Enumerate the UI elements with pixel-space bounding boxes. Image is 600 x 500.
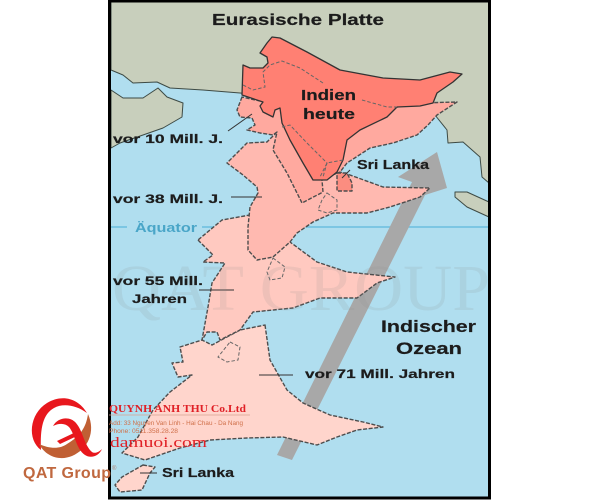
label: Äquator: Äquator bbox=[135, 220, 197, 235]
equator line bbox=[111, 226, 489, 228]
label: Indien heute: Indien bbox=[301, 87, 356, 104]
landmass: India 55 million years ago bbox=[198, 215, 395, 340]
label: Sri Lanka lower: Sri Lanka bbox=[162, 466, 235, 480]
landmass: India 38 million years ago bbox=[227, 132, 430, 260]
leader lines bbox=[140, 114, 350, 473]
company website: damuoi.com bbox=[110, 435, 207, 451]
company name: QUYNH ANH THU Co.Ltd bbox=[109, 404, 246, 415]
icon: QAT Group logo bbox=[32, 398, 102, 458]
label: vor 10 Mill. J.: vor 10 Mill. J. bbox=[113, 132, 223, 146]
landmass: India 71 million years ago bbox=[115, 325, 383, 492]
label: vor 71 Mill. Jahren: vor 71 Mill. Jahren bbox=[305, 367, 455, 381]
label: vor 38 Mill. J.: vor 38 Mill. J. bbox=[113, 192, 223, 206]
label: Indischer Ozean: Indischer bbox=[381, 317, 476, 336]
title: Eurasische Platte: Eurasische Platte bbox=[212, 12, 384, 29]
landmass: India 10 million years ago bbox=[237, 97, 457, 203]
label: vor 55 Mill. Jahren: Jahren bbox=[132, 292, 187, 306]
label: Indien heute: heute bbox=[303, 106, 355, 123]
company address: Add: 33 Nguyen Van Linh - Hai Chau - Da Nang bbox=[109, 420, 243, 427]
map frame bbox=[110, 1, 490, 498]
landmass: India today bbox=[242, 37, 462, 180]
former outlines inside India bbox=[243, 61, 397, 177]
company rule bbox=[109, 414, 250, 416]
watermark: QAT GROUP: QAT GROUP bbox=[112, 252, 490, 325]
label: vor 55 Mill. Jahren: vor 55 Mill. bbox=[113, 274, 203, 288]
registered mark: ® bbox=[112, 465, 117, 472]
company phone: Phone: 0511.358.28.28 bbox=[109, 428, 178, 435]
Eurasian plate land bbox=[111, 2, 489, 217]
arrow: plate movement direction bbox=[277, 152, 447, 460]
label: Indischer Ozean: Ozean bbox=[396, 339, 462, 358]
label: Sri Lanka upper: Sri Lanka bbox=[357, 158, 430, 172]
logo text: QAT Group: QAT Group bbox=[23, 465, 111, 482]
panel: map background ocean bbox=[110, 1, 490, 498]
